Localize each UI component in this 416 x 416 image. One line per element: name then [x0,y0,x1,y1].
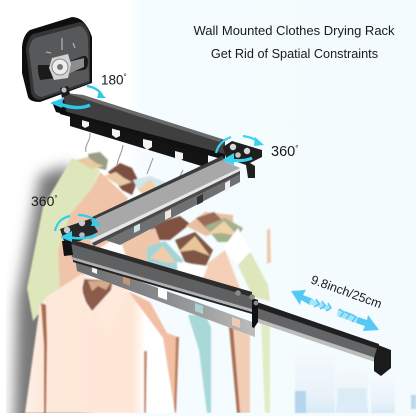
shirt: green lower [261,320,270,413]
label: left 360 degrees: ° [54,194,58,203]
title line 1: Wall Mounted Clothes Drying Rack [193,23,395,38]
slot holes [92,265,97,274]
label: elbow 360 degrees: ° [295,144,298,153]
arrow: elbow 360 degree rotation [216,136,264,165]
arm body [70,239,252,311]
hinge [52,100,67,115]
shirt: back green [27,158,100,321]
label: 180 degrees: ° [124,72,127,82]
plate marks [46,38,75,53]
shirt: teal neck [132,176,166,190]
inner plate [29,26,89,97]
hanger brown [82,279,113,311]
shirt: orange behind front [128,291,178,413]
end cap [374,345,391,376]
distant city skyline [295,355,416,413]
shirt: peach lower [232,329,251,413]
shirt: teal lower [188,315,211,413]
clamp [252,298,258,328]
shirt: right light green [238,252,270,302]
rack arm 1: upper arm with hook bracket [60,93,225,168]
label: left 360 degrees: 360 [31,193,54,209]
arm face [90,160,240,240]
bracket tabs [82,118,89,128]
arm dark top [90,156,226,222]
slotted underside rail [105,168,240,245]
slot holes [134,222,140,233]
bolt [49,54,71,80]
rack arm 2: middle arm [90,156,240,246]
shirt: front peach [25,275,175,413]
wall shadow [14,165,90,416]
arrow: left 360 degree rotation [55,215,101,242]
key bar [68,58,84,74]
middle ring [26,22,90,100]
arm body [60,93,225,158]
slotted lower rail [75,258,255,337]
title [193,23,395,61]
arrow: 180 degree rotation [50,86,106,108]
label: extension length: 9.8inch/25cm [309,273,384,311]
shirt: back peach [58,172,128,292]
hanger cluster under middle arm [150,216,190,240]
label: elbow 360 degrees: 360 [271,144,295,160]
title line 2: Get Rid of Spatial Constraints [211,47,378,61]
label: 180 degrees: 180 [101,72,124,88]
joint: elbow hinge [223,141,262,178]
black bracket [70,115,208,168]
arrow: extend right [337,309,379,331]
wall mount plate [22,17,92,115]
joint: left hinge [60,219,98,256]
hanging clothes [25,152,271,413]
collar [80,274,126,312]
outer pad [22,17,92,102]
rack arm 3: lower arm with telescopic end [70,239,391,376]
hanger wires [86,133,183,184]
arrow: extend left [291,290,331,311]
sleeve shading [41,303,47,413]
telescopic rail [255,303,378,361]
keyhole slot [38,56,88,80]
